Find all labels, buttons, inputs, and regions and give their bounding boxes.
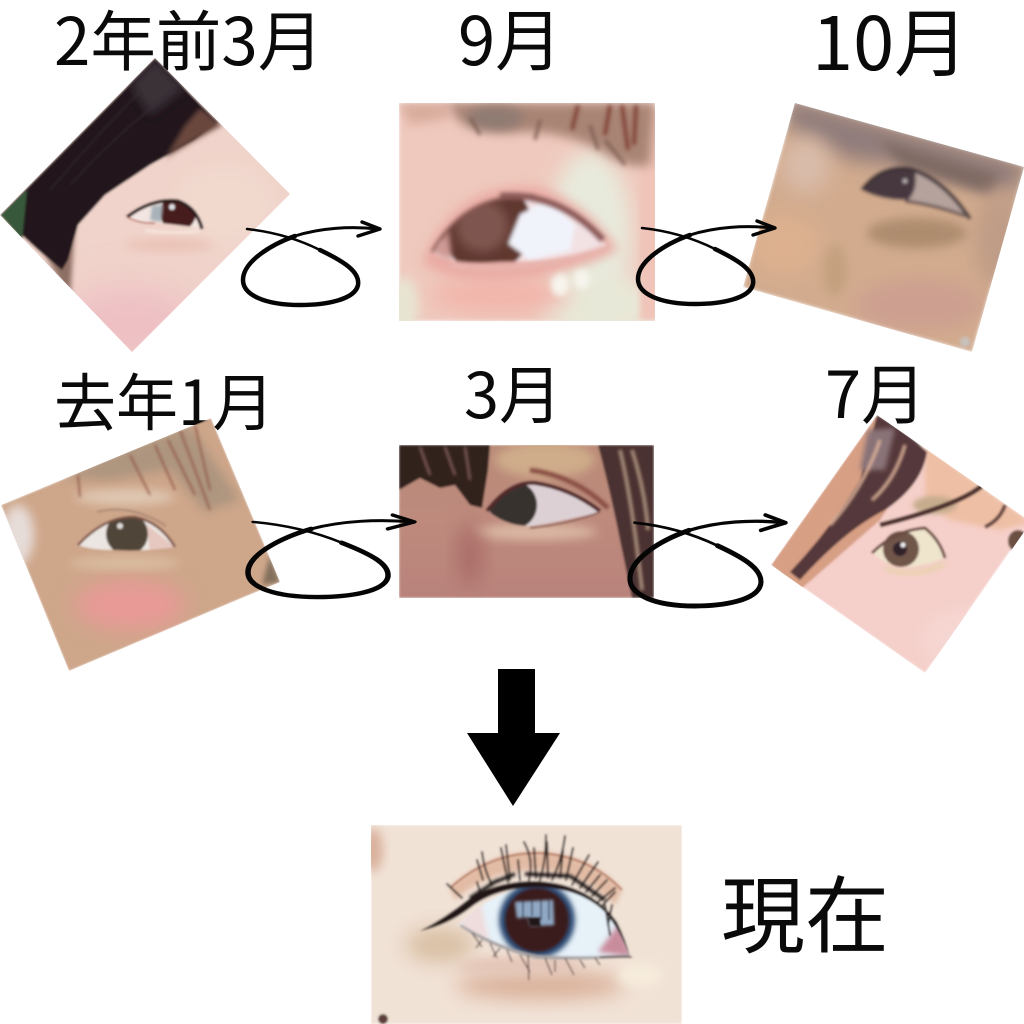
- photo: current eye: [363, 825, 682, 1024]
- lower lashes: [472, 933, 600, 980]
- arrow: large down arrow: [467, 669, 560, 806]
- photo: eye in September: [399, 103, 655, 321]
- upper lashes: [447, 835, 615, 935]
- arrow: loop arrow 1: [243, 222, 380, 305]
- eye sclera and iris: [458, 884, 630, 961]
- photo: eye in July last year: [771, 415, 1024, 673]
- heading: 3月: 3月: [464, 346, 562, 437]
- arrow: loop arrow 2: [638, 221, 775, 304]
- photo: eye in March last year: [399, 442, 654, 598]
- heading: 去年1月: 去年1月: [54, 353, 274, 443]
- arrow: loop arrow 3: [248, 515, 415, 597]
- photo: eye two years ago in March: [0, 58, 290, 352]
- eyeliner: [420, 881, 630, 957]
- photo: eye in October: [743, 95, 1024, 352]
- heading: 現在: 現在: [721, 850, 889, 971]
- mole: [378, 1014, 388, 1024]
- arrow: loop arrow 4: [630, 515, 786, 606]
- heading: 7月: 7月: [825, 343, 926, 437]
- photo: eye in January last year: [1, 418, 280, 671]
